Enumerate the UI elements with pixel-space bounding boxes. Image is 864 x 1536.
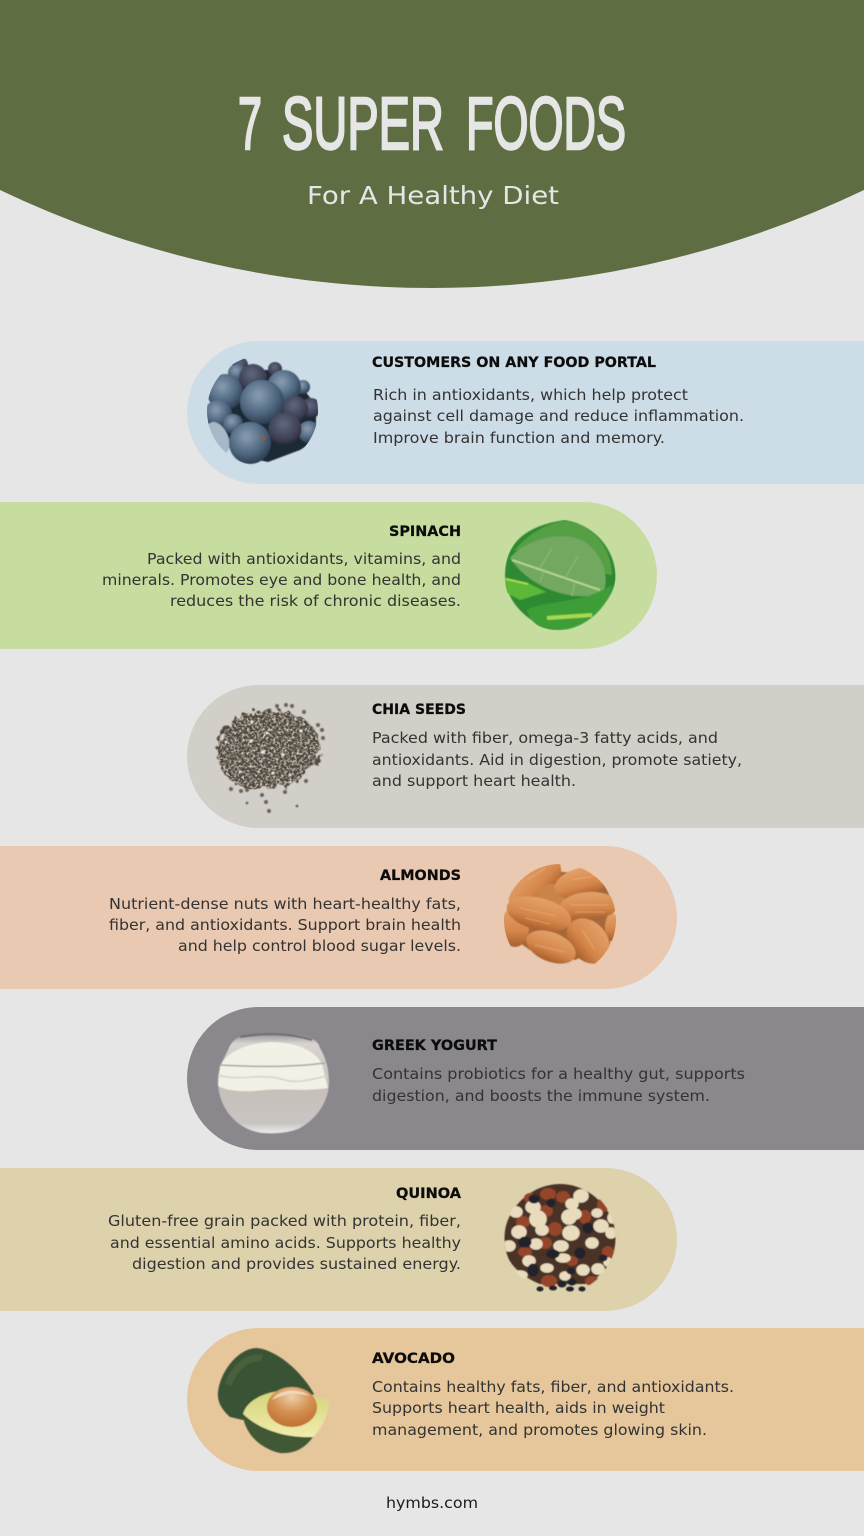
heading: CHIA SEEDS: [372, 702, 466, 718]
body text: Nutrient-dense nuts with heart-healthy fats,: [109, 895, 461, 913]
body text: Supports heart health, aids in weight: [372, 1399, 665, 1417]
heading: AVOCADO: [372, 1351, 455, 1367]
body text: Packed with fiber, omega-3 fatty acids, and: [372, 729, 718, 747]
footer: source: hymbs.com: [386, 1494, 478, 1512]
header banner: [0, 0, 864, 288]
panel: spinach: [0, 502, 657, 649]
body text: [372, 1065, 745, 1105]
title: FOODS: [466, 82, 626, 165]
body text: Gluten-free grain packed with protein, fiber,: [108, 1212, 461, 1230]
panel: almonds: [0, 846, 677, 989]
panel: blueberries: [187, 341, 864, 484]
icon: quinoa: [503, 1184, 616, 1292]
body text: and help control blood sugar levels.: [178, 937, 461, 955]
icon: blueberries: [202, 357, 321, 464]
panel: avocado: [187, 1328, 864, 1471]
body text: against cell damage and reduce inflammation.: [373, 407, 744, 425]
title: SUPER: [282, 82, 444, 165]
body text: minerals. Promotes eye and bone health, and: [102, 571, 461, 589]
heading: ALMONDS: [380, 868, 461, 884]
body text: Improve brain function and memory.: [373, 429, 665, 447]
icon: spinach: [505, 520, 616, 630]
body text: and support heart health.: [372, 772, 576, 790]
heading: SPINACH: [389, 524, 461, 540]
body text: [109, 895, 461, 955]
title: 7: [238, 82, 262, 165]
heading: GREEK YOGURT: [372, 1038, 497, 1054]
icon: avocado: [218, 1348, 329, 1453]
heading: CUSTOMERS ON ANY FOOD PORTAL: [372, 355, 656, 371]
body text: and essential amino acids. Supports healthy: [110, 1234, 461, 1252]
body text: management, and promotes glowing skin.: [372, 1421, 707, 1439]
panel: greek yogurt: [187, 1007, 864, 1150]
icon: yogurt bowl: [218, 1034, 329, 1133]
body text: digestion, and boosts the immune system.: [372, 1087, 710, 1105]
panel: chia seeds: [187, 685, 864, 828]
body text: [372, 729, 742, 790]
body text: [102, 550, 461, 610]
body text: fiber, and antioxidants. Support brain health: [109, 916, 461, 934]
body text: Contains probiotics for a healthy gut, supports: [372, 1065, 745, 1083]
title: [238, 82, 626, 165]
body text: reduces the risk of chronic diseases.: [170, 592, 461, 610]
body text: digestion and provides sustained energy.: [132, 1255, 461, 1273]
body text: Packed with antioxidants, vitamins, and: [147, 550, 461, 568]
panel: quinoa: [0, 1168, 677, 1311]
body text: antioxidants. Aid in digestion, promote satiety,: [372, 751, 742, 769]
icon: almonds: [504, 864, 616, 964]
heading: QUINOA: [396, 1186, 462, 1202]
icon: chia seeds: [217, 703, 325, 813]
body text: [372, 1378, 734, 1439]
subtitle: For A Healthy Diet: [307, 181, 559, 210]
body text: Contains healthy fats, fiber, and antioxidants.: [372, 1378, 734, 1396]
body text: Rich in antioxidants, which help protect: [373, 386, 688, 404]
body text: [108, 1212, 461, 1273]
body text: [373, 386, 744, 447]
